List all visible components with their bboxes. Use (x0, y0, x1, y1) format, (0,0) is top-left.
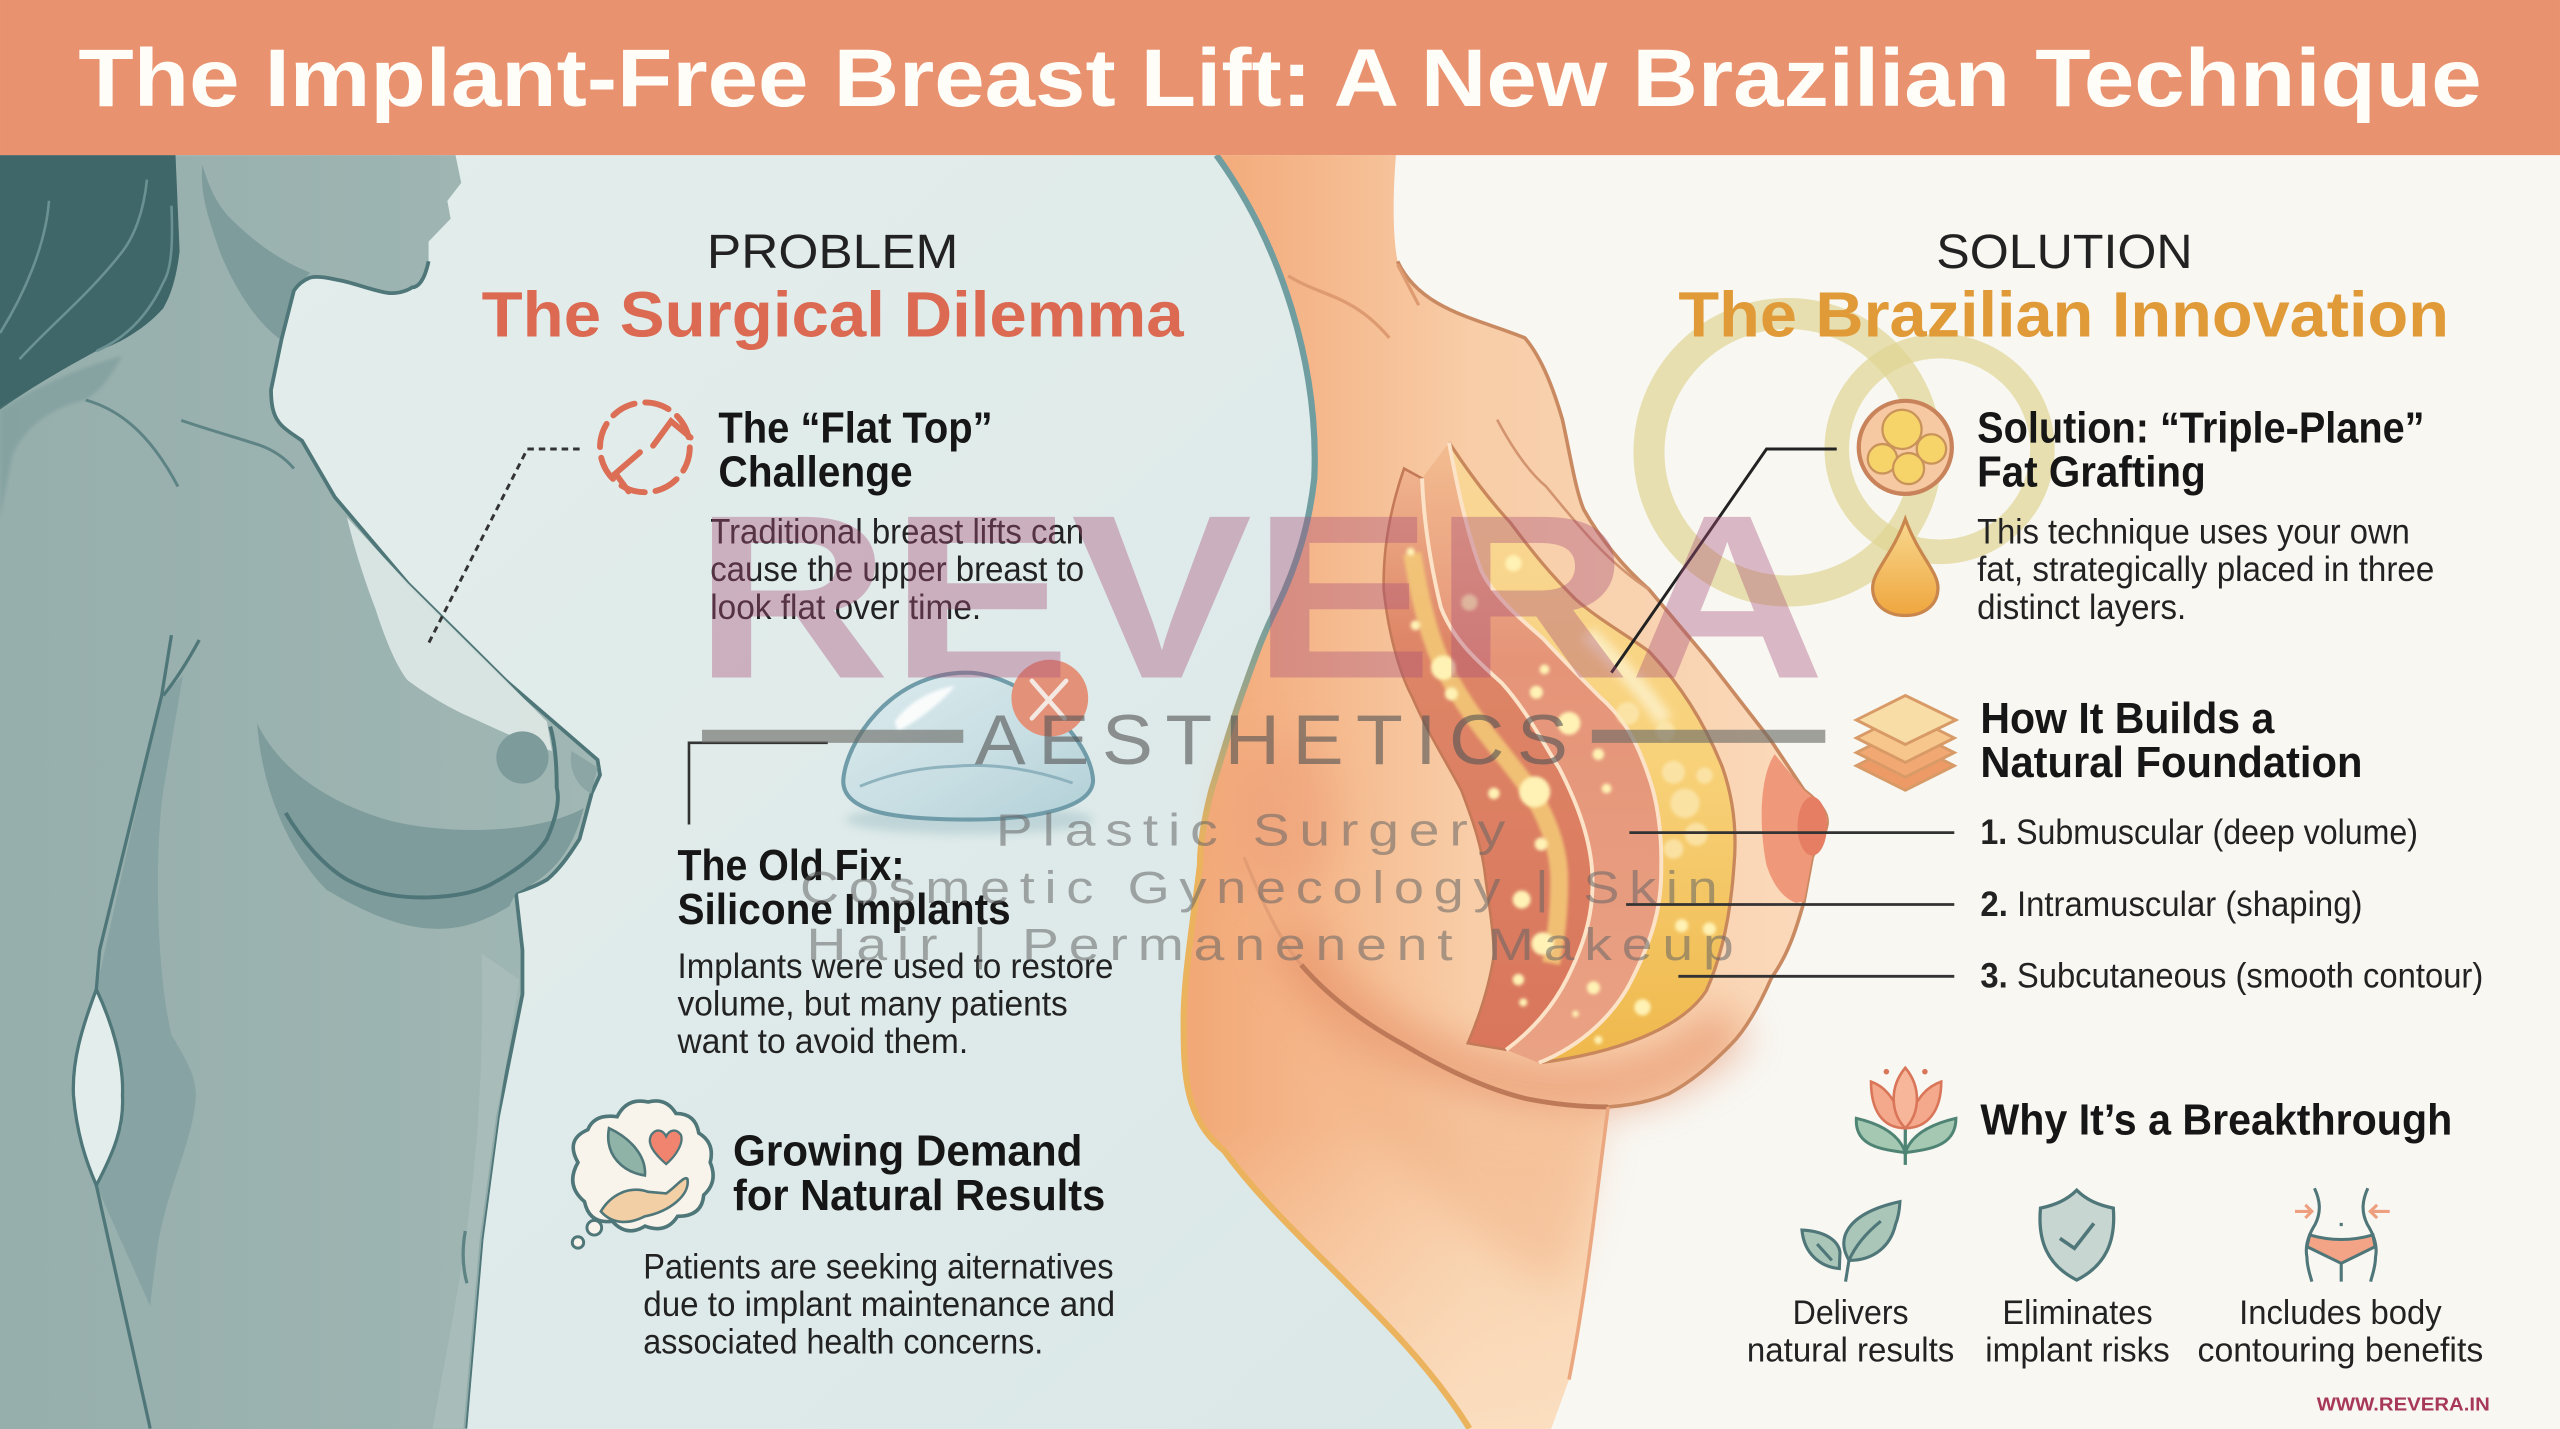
text: triple-plane fat grafting: This technique uses your own (1977, 513, 2410, 552)
layer leader lines (1626, 833, 1954, 976)
implant gloss highlight (895, 686, 955, 731)
illustration: grey figure (0, 155, 600, 1429)
text: triple-plane fat grafting: Fat Grafting (1977, 449, 2206, 497)
arm shadow (96, 676, 196, 1306)
under-arm gap (73, 989, 123, 1185)
pale separators (1422, 442, 1661, 1063)
text: natural foundation: How It Builds a (1980, 695, 2275, 743)
glowing dots (1407, 548, 1716, 1044)
captions: benefits: contouring benefits (2198, 1332, 2483, 1370)
heading: problem (482, 225, 1184, 350)
golden rings watermark (1649, 313, 2042, 591)
text: natural foundation: Natural Foundation (1980, 739, 2362, 787)
text: old fix: The Old Fix: (678, 842, 904, 890)
text: natural foundation (1980, 695, 2362, 787)
captions: benefits (1747, 1294, 2483, 1370)
list: three layers (1980, 813, 2483, 996)
subheading: the brazilian innovation: The Brazilian Innovation (1678, 279, 2449, 350)
watermark: revera aesthetics: Hair | Permanenent Makeup (807, 919, 1744, 970)
title banner (0, 0, 2560, 155)
watermark: revera aesthetics: Plastic Surgery (996, 805, 1515, 856)
captions: benefits: natural results (1747, 1332, 1954, 1370)
watermark: revera aesthetics: REVERA (694, 468, 1825, 728)
text: flat top challenge: The “Flat Top” (718, 404, 993, 452)
faint crease start (1244, 857, 1301, 965)
jaw and side outline (271, 261, 600, 1429)
text: growing demand: associated health concerns. (643, 1322, 1043, 1361)
text: old fix: Implants were used to restore (678, 947, 1113, 986)
website url: WWW.REVERA.IN (2317, 1394, 2490, 1415)
white streak highlight (1587, 633, 1665, 722)
dotted callout to upper breast (428, 449, 580, 645)
under-breast shading (257, 723, 584, 929)
collar lines (86, 400, 294, 487)
icon: stacked layers (1856, 696, 1956, 790)
text: growing demand (643, 1128, 1115, 1361)
text: triple-plane fat grafting: distinct layers. (1977, 588, 2186, 627)
nipple (1798, 797, 1827, 856)
implant callout line (689, 743, 828, 824)
under-breast shadow (1306, 1012, 1607, 1290)
illustration: fat graft layers (1384, 442, 1827, 1063)
text: growing demand: Growing Demand (733, 1128, 1082, 1176)
arm outline (96, 635, 199, 1429)
lower fade (1184, 1127, 1608, 1429)
icon: thought cloud with leaf heart and hand (572, 1101, 713, 1248)
implant rim (860, 765, 1073, 786)
text: triple-plane fat grafting (1977, 404, 2434, 627)
shoulder shadow (0, 356, 122, 518)
icon: flat top dashed circle (600, 402, 691, 492)
areola (496, 731, 549, 784)
inner shoulder fold (1497, 420, 1649, 589)
text: triple-plane fat grafting: Solution: “Triple-Plane” (1977, 404, 2424, 452)
title: The Implant-Free Breast Lift: A New Brazilian Technique (78, 33, 2482, 124)
nipple shade (571, 751, 598, 793)
breast crease outline (1301, 965, 1608, 1107)
under-breast fold (286, 727, 558, 898)
pale upper breast highlight (347, 518, 552, 751)
inner rose layer (1384, 469, 1593, 1050)
hair (0, 155, 180, 410)
heading: solution: SOLUTION (1936, 225, 2193, 279)
text: old fix (677, 842, 1113, 1061)
icon: leaf (1802, 1202, 1900, 1282)
crease inner shadow (1290, 931, 1731, 1088)
hair strands (0, 180, 172, 359)
neck creases (1288, 264, 1419, 338)
text: old fix: want to avoid them. (677, 1022, 968, 1061)
text: flat top challenge: Traditional breast lifts can (710, 513, 1084, 552)
fat blobs (1616, 702, 1713, 859)
captions: benefits: Eliminates (2002, 1294, 2153, 1332)
watermark: revera aesthetics: Cosmetic Gynecology | Skin (800, 862, 1727, 913)
text: flat top challenge: cause the upper breast to (710, 550, 1084, 589)
panel edge stroke (1184, 155, 1469, 1429)
text: growing demand: for Natural Results (733, 1172, 1105, 1220)
text: flat top challenge (710, 404, 1084, 627)
icon: waist (2295, 1188, 2390, 1282)
text: flat top challenge: Challenge (718, 449, 913, 497)
neck shadow (202, 165, 310, 340)
icon: fat cells (1859, 401, 1952, 494)
text: old fix: volume, but many patients (678, 985, 1068, 1024)
watermark: revera aesthetics (694, 468, 1825, 970)
areola (1762, 754, 1827, 903)
navel mark (463, 1231, 467, 1283)
text: triple-plane fat grafting: fat, strategically placed in three (1977, 550, 2434, 589)
text: growing demand: Patients are seeking aiternatives (643, 1247, 1113, 1286)
list: three layers: 1. Submuscular (deep volume) (1980, 813, 2418, 852)
outer yellow layer (1449, 442, 1735, 1063)
body right edge (1569, 1107, 1608, 1380)
icon: silicone implant (843, 660, 1094, 834)
icon: shield (2040, 1190, 2114, 1280)
heading: why breakthrough: Why It’s a Breakthrough (1980, 1097, 2452, 1145)
text: old fix: Silicone Implants (678, 886, 1011, 934)
right torso highlight (433, 953, 519, 1429)
icon: lotus (1856, 1068, 1956, 1165)
icon: oil drop (1873, 519, 1938, 616)
list: three layers: 2. Intramuscular (shaping) (1980, 885, 2362, 924)
watermark: revera aesthetics: AESTHETICS (975, 700, 1580, 779)
heading: solution (1678, 225, 2449, 350)
middle rose layer (1422, 442, 1661, 1063)
skin outline (1398, 261, 1827, 1107)
callout line to fat grafting (1611, 449, 1837, 673)
yellow stripe in inner layer (1412, 553, 1559, 963)
illustration: orange figure (1184, 155, 1827, 1429)
captions: benefits: Includes body (2239, 1294, 2442, 1332)
background: left panel (0, 155, 1469, 1429)
heading: problem: PROBLEM (707, 225, 958, 279)
list: three layers: 3. Subcutaneous (smooth contour) (1980, 957, 2483, 996)
subheading: the surgical dilemma: The Surgical Dilemma (482, 279, 1184, 350)
icon: red x badge (1011, 660, 1088, 736)
captions: benefits: implant risks (1985, 1332, 2170, 1370)
captions: benefits: Delivers (1793, 1294, 1909, 1332)
text: flat top challenge: look flat over time. (710, 588, 981, 627)
text: growing demand: due to implant maintenance and (643, 1285, 1115, 1324)
breast side shadow (1229, 735, 1334, 898)
